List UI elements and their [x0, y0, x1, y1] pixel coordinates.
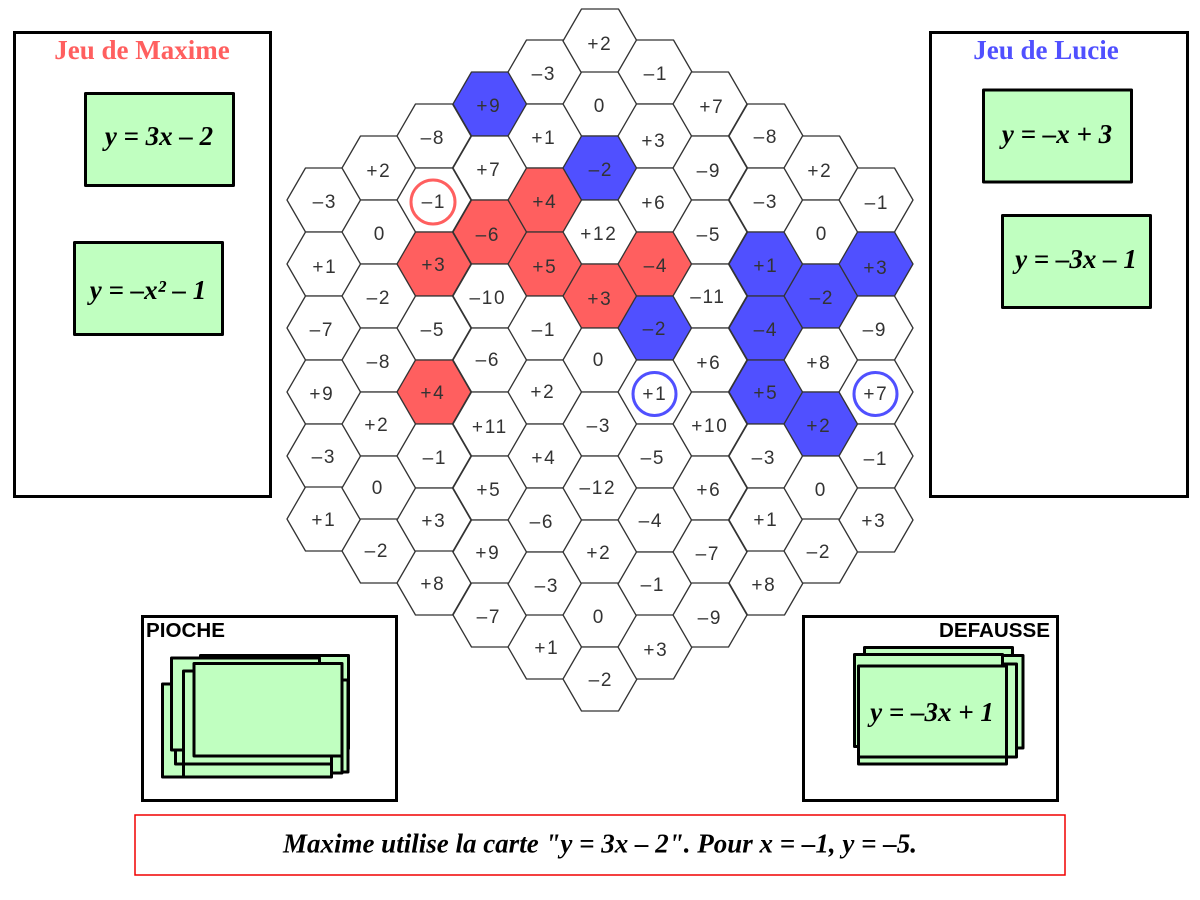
hex: +7: [839, 360, 913, 424]
hex: +12: [563, 200, 637, 264]
hex: +7: +7: [476, 160, 501, 181]
hex: +1: +1: [753, 510, 778, 531]
hex: +4 red: [397, 360, 471, 424]
hex: -8: [729, 104, 803, 168]
hex: -1: –1: [865, 193, 889, 214]
hex: +3: [618, 104, 692, 168]
hex: -3: –3: [313, 192, 337, 213]
hex: -5: [618, 424, 692, 488]
hex: +2: [784, 136, 858, 200]
hex: +5 blue: [729, 360, 803, 424]
card: y = 3x - 2: [86, 94, 234, 186]
hex: +8: +8: [751, 575, 776, 596]
hex: -12: –12: [579, 478, 616, 499]
hex: -9: –9: [697, 161, 721, 182]
hex: +5: [453, 456, 527, 520]
hex: -4: [618, 488, 692, 552]
hex: +1: [618, 360, 692, 424]
hex: +3: [397, 488, 471, 552]
hex: 0: 0: [816, 224, 828, 245]
hex: +1: [287, 487, 361, 551]
hex: +4 red: [508, 168, 582, 232]
hex: +3 red: [563, 264, 637, 328]
hex: +11: +11: [472, 417, 508, 438]
hex: +6: [618, 168, 692, 232]
hex: +7: [453, 136, 527, 200]
hex: 0: [563, 72, 637, 136]
hex: -4 red: [618, 232, 692, 296]
panel: DEFAUSSE: [804, 616, 1058, 800]
hex: -1: [508, 296, 582, 360]
hex: -5: [673, 200, 747, 264]
hex: +2: +2: [807, 161, 832, 182]
hex: -7: [287, 296, 361, 360]
hex: +4: +4: [531, 448, 556, 469]
hex: +1 blue: [729, 232, 803, 296]
hex: -6 red: –6: [476, 225, 500, 246]
hex: +4: [508, 424, 582, 488]
hex: 0: 0: [593, 350, 605, 371]
card: y = -x + 3: y = –x + 3: [999, 119, 1112, 149]
hex: -1: –1: [422, 192, 446, 213]
hex: -12: [563, 456, 637, 520]
card text: y = -3x + 1: y = –3x + 1: [867, 697, 994, 727]
hex: +8: [729, 551, 803, 615]
hex: -11: [673, 264, 747, 328]
hex: +8: [397, 551, 471, 615]
hex: +6: +6: [641, 193, 666, 214]
hex: -2 blue: –2: [643, 319, 667, 340]
hex: +2: +2: [587, 34, 612, 55]
hex: +7: +7: [699, 97, 724, 118]
card: y = -x + 3: [984, 90, 1132, 182]
hex: +3 red: +3: [421, 255, 446, 276]
hex: -3: [508, 552, 582, 616]
hex: -7: –7: [477, 607, 501, 628]
hex: 0: [784, 456, 858, 520]
hex: -8: –8: [421, 128, 445, 149]
hex: -1: [618, 40, 692, 104]
hex: +9: [287, 360, 361, 424]
hex: 0: 0: [374, 224, 386, 245]
marker: blue circle on +1: [633, 372, 676, 416]
hex: +9 blue: [453, 72, 527, 136]
hex: +3 blue: +3: [863, 258, 888, 279]
hex: -7: [453, 583, 527, 647]
hex: +3 red: +3: [587, 289, 612, 310]
card: y = -x2 - 1: [74, 242, 222, 334]
hex: -1: –1: [644, 64, 668, 85]
hex: 0: 0: [593, 607, 605, 628]
hex: +3: +3: [643, 640, 668, 661]
hex: +10: [673, 392, 747, 456]
hex: +6: [673, 328, 747, 392]
hex: +1: +1: [312, 257, 337, 278]
hex: -10: [453, 264, 527, 328]
hex: -1: –1: [532, 320, 556, 341]
hex: +1: [287, 232, 361, 296]
hex: -3: [287, 168, 361, 232]
hex: -1: [839, 424, 913, 488]
hex: -3: –3: [532, 64, 556, 85]
hex: +5 blue: +5: [753, 383, 778, 404]
hex: +5 red: [508, 232, 582, 296]
hex: -3: –3: [752, 448, 776, 469]
hex: -2 blue: –2: [589, 160, 613, 181]
hex: +1: +1: [531, 128, 556, 149]
hex: -5: [397, 296, 471, 360]
card: y = 3x - 2: y = 3x – 2: [102, 121, 213, 151]
panel: PIOCHE: [142, 616, 396, 800]
hex: +1: [729, 488, 803, 552]
hex: -3: [729, 168, 803, 232]
hex: +9: +9: [475, 543, 500, 564]
hex: -3: –3: [312, 447, 336, 468]
hex: +5: +5: [476, 480, 501, 501]
hex: +2: +2: [366, 161, 391, 182]
hex: -2 blue: –2: [810, 288, 834, 309]
hex: -4 red: –4: [644, 256, 668, 277]
hex: +4 red: +4: [532, 192, 557, 213]
marker: red circle: [411, 180, 455, 224]
hex: +8: +8: [806, 353, 831, 374]
hex: +2: +2: [586, 543, 611, 564]
hex: -8: [342, 328, 416, 392]
hex: +1: [508, 104, 582, 168]
hex: -3: –3: [535, 576, 559, 597]
hex: +12: +12: [580, 224, 618, 245]
hex: -3: –3: [754, 192, 778, 213]
hex: -4: –4: [639, 511, 663, 532]
hex: -8: –8: [367, 352, 391, 373]
hex: 0: 0: [372, 478, 384, 499]
hex: +2: +2: [364, 415, 389, 436]
hex: -9: [673, 136, 747, 200]
hex: +9 blue: +9: [476, 96, 501, 117]
hex: -1: –1: [641, 575, 665, 596]
card: y = -3x - 1: [1002, 216, 1150, 308]
hex: -11: –11: [690, 287, 726, 308]
hex: +10: +10: [691, 416, 729, 437]
hex: -3: [508, 40, 582, 104]
hex: +2 blue: [784, 392, 858, 456]
hex: -10: –10: [469, 288, 506, 309]
hex: -8: [397, 104, 471, 168]
hex: 0: [342, 200, 416, 264]
hex: +9: [453, 520, 527, 584]
hex: +2: +2: [530, 382, 555, 403]
hex: 0: 0: [815, 480, 827, 501]
hexagonal game board: [287, 9, 913, 711]
hex: +3: [839, 488, 913, 552]
hex: +6: +6: [696, 353, 721, 374]
hex: -9: [673, 583, 747, 647]
label: PIOCHE: PIOCHE: [146, 619, 225, 642]
hex: -6: [508, 488, 582, 552]
hex: +4 red: +4: [420, 383, 445, 404]
hex: -2: –2: [807, 542, 831, 563]
caption bar: [135, 815, 1065, 875]
card: y = -x2 - 1: y = –x² – 1: [87, 275, 206, 305]
hex: -1: –1: [423, 448, 447, 469]
hex: +7: +7: [863, 384, 888, 405]
hex: +8: +8: [420, 574, 445, 595]
hex: -2 blue: [784, 264, 858, 328]
hex: +2: [508, 360, 582, 424]
hex: +11: [453, 392, 527, 456]
hex: -9: –9: [863, 320, 887, 341]
hex: -5: –5: [697, 225, 721, 246]
hex: -8: –8: [754, 127, 778, 148]
hex: +1: +1: [534, 638, 559, 659]
hex: +7: [673, 72, 747, 136]
caption text: Maxime utilise la carte "y = 3x – 2". Pour x = –1, y = –5.: [282, 828, 917, 858]
card: y = -3x - 1: y = –3x – 1: [1012, 244, 1137, 274]
hex: 0: 0: [594, 96, 606, 117]
hex: +2: [342, 392, 416, 456]
hex: -3: [287, 424, 361, 488]
panel: Jeu de Lucie: [930, 32, 1188, 496]
hex: 0: [563, 583, 637, 647]
hex: 0: [563, 328, 637, 392]
hex: -4 blue: [729, 296, 803, 360]
heading: Jeu de Lucie: Jeu de Lucie: [973, 35, 1119, 65]
hex: -2: [342, 519, 416, 583]
hex: -2: –2: [367, 288, 391, 309]
hex: +3: +3: [861, 511, 886, 532]
hex: -2: –2: [589, 670, 613, 691]
hex: -2: [563, 647, 637, 711]
hex: 0: [342, 456, 416, 520]
hex: -7: –7: [310, 320, 334, 341]
hex: +8: [784, 328, 858, 392]
hex: +2: [563, 9, 637, 73]
hex: +6: [673, 456, 747, 520]
panel: Jeu de Maxime: [14, 32, 270, 496]
hex: -2 blue: [618, 296, 692, 360]
label: DEFAUSSE: DEFAUSSE: [939, 619, 1050, 642]
hex: -2 blue: [563, 136, 637, 200]
hex: +1: +1: [311, 510, 336, 531]
marker: blue circle on +7: [854, 372, 897, 416]
hex: -2: [784, 519, 858, 583]
hex: -1: [839, 168, 913, 232]
hex: -3: [729, 424, 803, 488]
heading: Jeu de Maxime: Jeu de Maxime: [54, 35, 230, 65]
hex: -4 blue: –4: [754, 320, 778, 341]
hex: -1: [397, 424, 471, 488]
hex: +1: +1: [642, 384, 667, 405]
hex: -5: –5: [421, 320, 445, 341]
hex: +2 blue: +2: [806, 416, 831, 437]
hex: -1: –1: [864, 449, 888, 470]
hex: -7: –7: [696, 544, 720, 565]
hex: +3: +3: [641, 131, 666, 152]
hex: +3: [618, 615, 692, 679]
hex: +1: [508, 615, 582, 679]
hex: -2: –2: [365, 541, 389, 562]
hex: -6: [453, 328, 527, 392]
hex: -2: [342, 264, 416, 328]
hex: +3 blue: [839, 232, 913, 296]
hex: -6 red: [453, 200, 527, 264]
hex: +1 blue: +1: [753, 256, 778, 277]
hex: -1: [397, 168, 471, 232]
hex: -3: –3: [587, 416, 611, 437]
hex: -6: –6: [530, 512, 554, 533]
hex: -5: –5: [641, 448, 665, 469]
hex: +5 red: +5: [532, 257, 557, 278]
hex: -7: [673, 520, 747, 584]
hex: +3: +3: [421, 511, 446, 532]
hex: +6: +6: [696, 480, 721, 501]
discard pile of cards: [854, 648, 1023, 764]
hex: +9: +9: [309, 384, 334, 405]
hex: -9: [839, 296, 913, 360]
hex: +2: [563, 520, 637, 584]
hex: +3 red: [397, 232, 471, 296]
draw pile of cards: [162, 656, 348, 777]
hex: -1: [618, 552, 692, 616]
hex: -3: [563, 392, 637, 456]
hex: +2: [342, 136, 416, 200]
hex: -9: –9: [698, 608, 722, 629]
hex: 0: [784, 200, 858, 264]
hex: -6: –6: [476, 350, 500, 371]
